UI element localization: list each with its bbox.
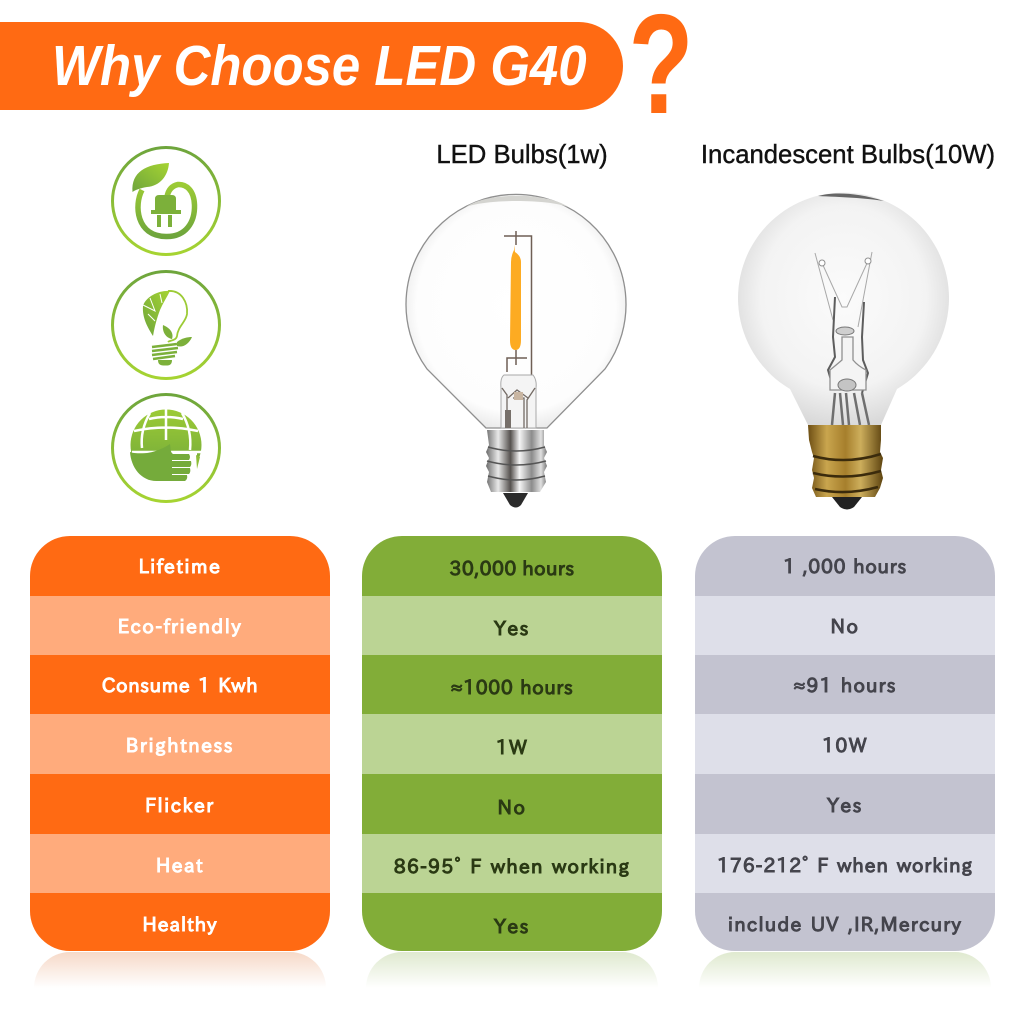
table column: labels: Consume 1 Kwh <box>102 676 258 695</box>
bulb tip <box>832 497 862 510</box>
table column: LED values <box>362 536 662 951</box>
table column: LED values: Yes <box>494 619 530 638</box>
table column: LED values: 1W <box>496 738 528 757</box>
support wires <box>504 231 532 377</box>
filament wires <box>815 252 872 327</box>
top shading <box>818 193 884 201</box>
glass stem <box>501 375 536 428</box>
LED bulb photo <box>405 194 627 508</box>
title banner <box>0 22 623 110</box>
table column: incandescent values: 10W <box>822 736 868 755</box>
table column: incandescent values: Yes <box>827 796 863 815</box>
icon: leaf and plug <box>112 148 220 254</box>
table column: labels: Eco-friendly <box>118 617 242 636</box>
table column: labels: Healthy <box>142 915 218 934</box>
bulb tip <box>503 493 528 508</box>
reflection: labels column <box>34 952 326 988</box>
top glass shading <box>466 196 568 207</box>
table column: incandescent values: 1 ,000 hours <box>783 557 907 576</box>
icon: globe in hand <box>112 394 220 502</box>
reflection: LED column <box>366 952 658 988</box>
table column: labels: Flicker <box>145 796 215 815</box>
brass screw base <box>808 425 883 497</box>
table column: incandescent values: include UV ,IR,Mercury <box>728 915 962 934</box>
table column: LED values: 30,000 hours <box>449 559 575 578</box>
incandescent bulb photo <box>738 192 949 510</box>
filament <box>510 245 521 350</box>
metal screw base <box>486 430 547 492</box>
table column: labels: Lifetime <box>139 557 221 576</box>
title banner: Why Choose LED G40 <box>52 34 587 98</box>
table column: incandescent values: No <box>831 617 859 636</box>
heading: incandescent bulbs: Incandescent Bulbs(10W) <box>701 141 995 169</box>
reflection: incandescent column <box>699 952 991 988</box>
table column: LED values: ≈1000 hours <box>451 678 573 697</box>
table column: incandescent values: 176-212° F when working <box>717 856 973 875</box>
table column: labels: Heat <box>156 856 204 875</box>
icons column <box>111 146 221 503</box>
support wires and stem <box>828 297 868 393</box>
table column: LED values: No <box>498 798 526 817</box>
glass globe <box>738 193 949 425</box>
table column: incandescent values: ≈91 hours <box>793 676 897 695</box>
table column: LED values: Yes <box>494 917 530 936</box>
table column: labels: Brightness <box>126 736 234 755</box>
heading: LED bulbs: LED Bulbs(1w) <box>436 141 608 169</box>
table column: incandescent values <box>695 536 995 951</box>
table column: labels <box>30 536 330 951</box>
glass globe <box>406 194 626 428</box>
icon: eco light bulb <box>112 272 220 378</box>
table column: LED values: 86-95° F when working <box>394 857 630 876</box>
